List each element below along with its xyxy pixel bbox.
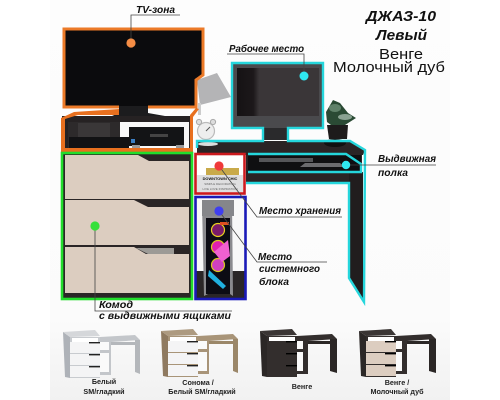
books [197, 168, 243, 192]
label: комод: Комод [99, 299, 134, 311]
label: TV-зона [126, 4, 180, 48]
product title: Венге [379, 46, 423, 63]
TV stand [112, 106, 165, 116]
plant [326, 100, 356, 139]
monitor [232, 63, 323, 140]
books: SIMPLE DECORATING [204, 182, 236, 186]
label: место системного блока: Место [258, 251, 293, 263]
TV-zone panel [61, 29, 203, 152]
orange outline of shelf [61, 108, 199, 152]
label: место хранения [214, 161, 342, 217]
lamp and clock [196, 73, 231, 140]
label: Рабочее место: Рабочее место [229, 43, 305, 55]
label: комод [90, 221, 232, 322]
variant: sonoma: Сонома / [182, 378, 214, 387]
label: место системного блока [214, 206, 327, 288]
label: место хранения: Место хранения [259, 205, 341, 217]
desktop and keyboard shelf [197, 141, 365, 155]
books: LIVE LOVE INSPIRATION [202, 187, 238, 191]
label: комод: с выдвижными ящиками [99, 310, 232, 322]
label: место системного блока: блока [259, 276, 289, 288]
media shelf [62, 116, 193, 151]
drawer 1 [65, 155, 189, 199]
label: выдвижная полка [342, 153, 436, 179]
books: DOWNTOWN CHIC [203, 176, 238, 181]
product title: Молочный дуб [333, 59, 445, 76]
drawer 2 [65, 200, 189, 245]
label: выдвижная полка: Выдвижная [378, 153, 436, 165]
variant: sonoma [161, 329, 238, 396]
variant: white [63, 330, 140, 396]
chest of drawers panel [62, 153, 192, 299]
TV screen [65, 30, 202, 107]
storage panel [195, 154, 244, 194]
right leg [349, 172, 363, 299]
desk panel [197, 63, 365, 302]
label: выдвижная полка: полка [378, 167, 408, 179]
label: Рабочее место [227, 43, 308, 80]
label: TV-зона: TV-зона [136, 4, 175, 16]
system unit panel [195, 197, 246, 299]
variant: wenge: Венге [292, 382, 312, 391]
variant: wenge and milk oak [359, 329, 436, 396]
variant: white: Белый [92, 377, 116, 386]
variant: white: SM/гладкий [83, 387, 125, 396]
drawer 3 [65, 247, 189, 293]
product title [333, 8, 445, 76]
PC case [202, 200, 234, 296]
product title: Левый [375, 27, 427, 44]
variant: wenge and milk oak: Молочный дуб [370, 387, 424, 396]
variant: sonoma: Белый SM/гладкий [168, 387, 236, 396]
variant: wenge [260, 329, 337, 391]
product title: ДЖАЗ-10 [364, 8, 437, 25]
label: место системного блока: системного [259, 263, 321, 275]
media devices [69, 137, 129, 148]
desk outline [197, 63, 365, 302]
speaker [78, 123, 110, 138]
variant: wenge and milk oak: Венге / [385, 378, 409, 387]
